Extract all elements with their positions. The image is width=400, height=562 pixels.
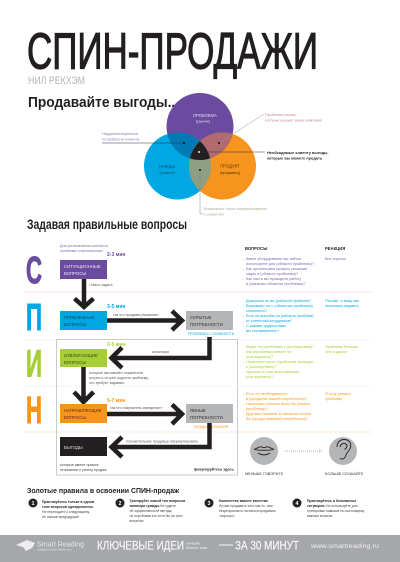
footer time: ЗА 30 МИНУТ (235, 540, 299, 552)
rule 3: безрезультатно пытаться продавать (219, 509, 276, 513)
box: explicit needs: ЯВНЫЕ (190, 408, 206, 413)
time: problem: 3-5 мин (107, 304, 125, 310)
reaction: implication: Проблема больше, (325, 345, 359, 349)
questions: situation: в (смежных областях проблемы)? (246, 282, 306, 286)
questions: problem (243, 299, 314, 333)
footer url: www.smartreading.ru (310, 543, 379, 550)
venn diagram: (продавец) (220, 170, 241, 175)
rule 1: Практикуйтесь только в одном (42, 500, 95, 504)
rule 4 (292, 498, 365, 518)
questions: problem: вы сталкиваетесь? (246, 329, 279, 333)
questions: implication: - (243, 350, 245, 354)
box: implication questions: ВОПРОСЫ (64, 360, 86, 365)
questions: problem: Возникают ли с (областью проблемы) (246, 304, 313, 308)
box: need-payoff questions (60, 404, 107, 423)
arrow: need-payoff to explicit needs (107, 404, 182, 424)
questions: implication: Как (проблема) влияет на (246, 350, 292, 354)
callout: possible conflict (199, 169, 267, 216)
note: payoff arrow: так что покупатель определяет: (110, 406, 163, 410)
icon: logo (16, 540, 35, 551)
rule 2: 2 (118, 501, 122, 507)
rule 1 (28, 498, 95, 519)
box: explicit needs: ПОТРЕБНОСТИ (190, 415, 223, 420)
reaction: problem: Похоже, я вижу как (325, 299, 359, 303)
questions: need-payoff: - (243, 402, 245, 406)
note: focus here: фокусируйтесь здесь (194, 468, 234, 472)
questions: problem: - (243, 314, 245, 318)
note: implication: которые заставляют покупателя (89, 371, 143, 375)
questions: problem: Есть ли жалобы на (область проблем) (246, 314, 314, 318)
rule 3: Лучше продавать хоть как-то, чем (219, 504, 273, 508)
questions: need-payoff: Другими словами, в каком вы хотели (246, 412, 311, 416)
callout: key benefits: Необходимые клиенту выгоды, (267, 150, 328, 155)
questions: need-payoff: - (243, 412, 245, 416)
rule 4: ситуациях. (307, 504, 325, 508)
author: НИЛ РЕКХЭМ (28, 75, 85, 87)
questions: problem: - (243, 324, 245, 328)
reaction: problem: несколько недавно (325, 304, 359, 308)
note: difficulties: ПРОБЛЕМЫ / СЛОЖНОСТИ (188, 332, 235, 336)
box: implication questions: ИЗВЛЕКАЮЩИЕ (64, 353, 98, 358)
rule 2: минимум трижды. (130, 504, 160, 508)
note: sale: отношение к успеху продаж (60, 468, 107, 472)
rule 1: 1 (31, 501, 35, 507)
box: need-payoff questions: ВОПРОСЫ (64, 415, 86, 420)
questions: problem: - (243, 299, 245, 303)
venn diagram: ПРОДУКТ (220, 164, 240, 168)
footer dash (219, 544, 233, 546)
arrow: implied needs to implication (112, 337, 210, 368)
rule 3: 3 (207, 501, 211, 507)
questions: problem: сложности? (246, 309, 267, 313)
rule 3: Количество важнее качества. (219, 499, 269, 503)
note: implication (89, 371, 149, 385)
callout: possible conflict: Возможные точки соприкосновения (204, 207, 267, 211)
questions: implication: к (последствию)? (246, 365, 277, 369)
column header: reaction: РЕАКЦИЯ (325, 246, 345, 251)
arrow: problem to implied needs (107, 311, 182, 330)
note: wants: НУЖДЫ / ЖЕЛАНИЯ (194, 425, 229, 429)
box: problem questions: ПРОБЛЕМНЫЕ (64, 315, 95, 320)
questions: situation: - (243, 277, 245, 281)
footer small: лучших (186, 540, 200, 546)
questions: situation: Как организован процесс решения (246, 267, 307, 271)
column header: questions: ВОПРОСЫ (245, 246, 267, 251)
situation intro: 2-3 мин (107, 252, 125, 258)
label: listen more: БОЛЬШЕ СЛУШАЙТЕ (325, 472, 364, 476)
rule 2: об эффективности метода, (130, 509, 172, 513)
note: implication: острее и острее ощутить проблему, (89, 376, 149, 380)
footer band (0, 535, 400, 562)
SPIN letter P: П (26, 297, 42, 339)
box: problem questions (60, 311, 107, 330)
box: situation questions: СИТУАЦИОННЫЕ (64, 264, 101, 269)
questions: implication: Удается ли при этом избежать (246, 370, 300, 374)
situation intro (60, 244, 125, 258)
icon: ear, listen more (329, 437, 357, 465)
note: problem arrow: так что продавец выявляет: (113, 313, 159, 317)
note: implication: что требует задавать (89, 381, 125, 385)
venn diagram: (клиент) (159, 170, 175, 175)
rule 1: типе вопросов одновременно. (42, 505, 94, 509)
venn diagram (144, 93, 256, 200)
questions: need-payoff: бы (продукта/вашей потребности)? (246, 417, 308, 421)
time: need-payoff: 5-7 мин (107, 398, 125, 404)
questions: problem: - (243, 304, 245, 308)
arrow: situation to problem (74, 279, 94, 307)
callout: unmet needs (102, 132, 185, 144)
note: sale: которые имеют прямое (60, 463, 99, 467)
reaction: need-payoff (325, 392, 351, 401)
rule 1: не освоив предыдущий (42, 515, 79, 519)
box: benefits: ВЫГОДЫ (64, 445, 83, 450)
icon: mouth, talk less (250, 437, 278, 465)
rule 4: 4 (295, 501, 299, 507)
questions: implication: - (243, 345, 245, 349)
venn diagram: ПРОБЛЕМА (193, 113, 217, 118)
questions: situation: используете для (области проблемы)? (246, 262, 314, 266)
questions: situation: - (243, 267, 245, 271)
note: sale (60, 463, 107, 472)
reaction: problem (325, 299, 359, 308)
rule 4: Не используйте для (326, 504, 358, 508)
SPIN letter N: Н (26, 390, 42, 432)
box: situation questions: ВОПРОСЫ (64, 271, 86, 276)
arrow: implication to need-payoff (74, 367, 94, 402)
questions: situation (243, 257, 314, 286)
questions: implication: - (243, 360, 245, 364)
reaction: situation: Все хорошо (325, 257, 346, 261)
reaction: implication (325, 345, 359, 354)
rule 2: не опробовав его хотя бы на трех (130, 514, 183, 518)
footer small 2: бизнес книг (186, 545, 208, 550)
questions: need-payoff: - (243, 392, 245, 396)
questions: need-payoff (243, 392, 311, 421)
arrow: explicit needs to benefits (112, 423, 210, 457)
callout: key benefits (198, 150, 328, 160)
flow frame (56, 340, 238, 475)
time: implication: 3-5 мин (107, 342, 125, 348)
rule 2: Тренируйте новый тип вопросов (130, 499, 185, 503)
rule 2: Не судите (160, 504, 176, 508)
callout: market problems: Проблемы рынка, (265, 113, 297, 117)
questions: problem: Довольны ли вы (работой проблем)? (246, 299, 311, 303)
questions: implication: Насколько часто (проблема) приводит (246, 360, 314, 364)
rule 2 (116, 498, 185, 523)
callout: market problems: которые решает ваша компания (265, 118, 322, 122)
questions: need-payoff: (проблему)? (246, 407, 268, 411)
heading: right questions: Задавая правильные вопросы (27, 216, 187, 232)
rule 2: встречах (130, 519, 144, 523)
rule 4: тренировки навыков по-настоящему (307, 509, 365, 513)
box: implied needs (186, 311, 233, 330)
footer slogan: КЛЮЧЕВЫЕ ИДЕИ (97, 540, 184, 552)
callout: market problems (218, 113, 322, 144)
box: implied needs: ПОТРЕБНОСТИ (190, 322, 223, 327)
questions: problem: С какими трудностями (246, 324, 286, 328)
rule 3: «хорошо» (219, 514, 235, 518)
questions: need-payoff: Есть ли необходимость (246, 392, 287, 396)
callout: key benefits: которые вы можете продать (267, 156, 323, 160)
box: implication questions (60, 349, 107, 367)
questions: situation: Как часто вы проводите работу (246, 277, 301, 281)
callout: unmet needs: потребности клиента (102, 138, 140, 142)
questions: situation: Какое оборудование вы сейчас (246, 257, 301, 261)
questions: situation: - (243, 257, 245, 261)
logo tagline: саммари лучших бизнес книг (37, 548, 72, 552)
questions: need-payoff: в (продуктах вашей потребности)? (246, 397, 307, 401)
box: problem questions: ВОПРОСЫ (64, 322, 86, 327)
callout: possible conflict: с клиентом (204, 212, 224, 216)
row dividers (25, 291, 372, 293)
questions: situation: задач в (области проблемы)? (246, 272, 298, 276)
questions: problem: от клиентов/сотрудников? (246, 319, 292, 323)
arrow: dotted (285, 450, 322, 452)
logo text: Smart Reading (37, 542, 84, 548)
note: benefits arrow: положительное продавца сформулировать (126, 440, 198, 444)
box: explicit needs (186, 404, 233, 423)
questions: implication: (последствия)? (246, 375, 273, 379)
note: ask few: • Мало задать (89, 283, 113, 287)
questions: implication (243, 345, 314, 379)
reaction: implication: чем я думал (325, 350, 347, 354)
callout: unmet needs: Неудовлетворенные (102, 132, 138, 136)
questions: need-payoff: Насколько полезно было бы решить (246, 402, 310, 406)
rule 4: Практикуйтесь в безопасных (307, 499, 356, 503)
SPIN letter I: И (26, 344, 42, 386)
situation intro: Для установления контекста (60, 244, 108, 248)
SPIN letter S: С (26, 250, 42, 292)
box: need-payoff questions: НАПРАВЛЯЮЩИЕ (64, 408, 102, 413)
venn diagram: НУЖДЫ (159, 164, 175, 169)
questions: implication: Ведет ли (проблема) к (последствию)? (246, 345, 314, 349)
box: implied needs: СКРЫТЫЕ (190, 315, 212, 320)
heading: benefits: Продавайте выгоды... (28, 95, 179, 111)
rule 1: Не переходите к следующему, (42, 510, 90, 514)
venn diagram: (рынок) (196, 118, 211, 124)
questions: implication: (последствие)? (246, 355, 273, 359)
box: situation questions (60, 260, 107, 279)
questions: implication: - (243, 370, 245, 374)
rule 3 (204, 498, 276, 518)
label: talk less: МЕНЬШЕ ГОВОРИТЕ (245, 472, 284, 476)
reaction: need-payoff: проблему (325, 397, 342, 401)
box: benefits (60, 437, 107, 456)
heading: golden rules: Золотые правила в освоении СПИН-продаж (27, 486, 180, 495)
note: use: используя (152, 350, 169, 354)
rule 4: важные встречи (307, 514, 332, 518)
situation intro: проблемы клиента/рынка (60, 249, 103, 253)
reaction: need-payoff: Я хочу решить (325, 392, 351, 396)
